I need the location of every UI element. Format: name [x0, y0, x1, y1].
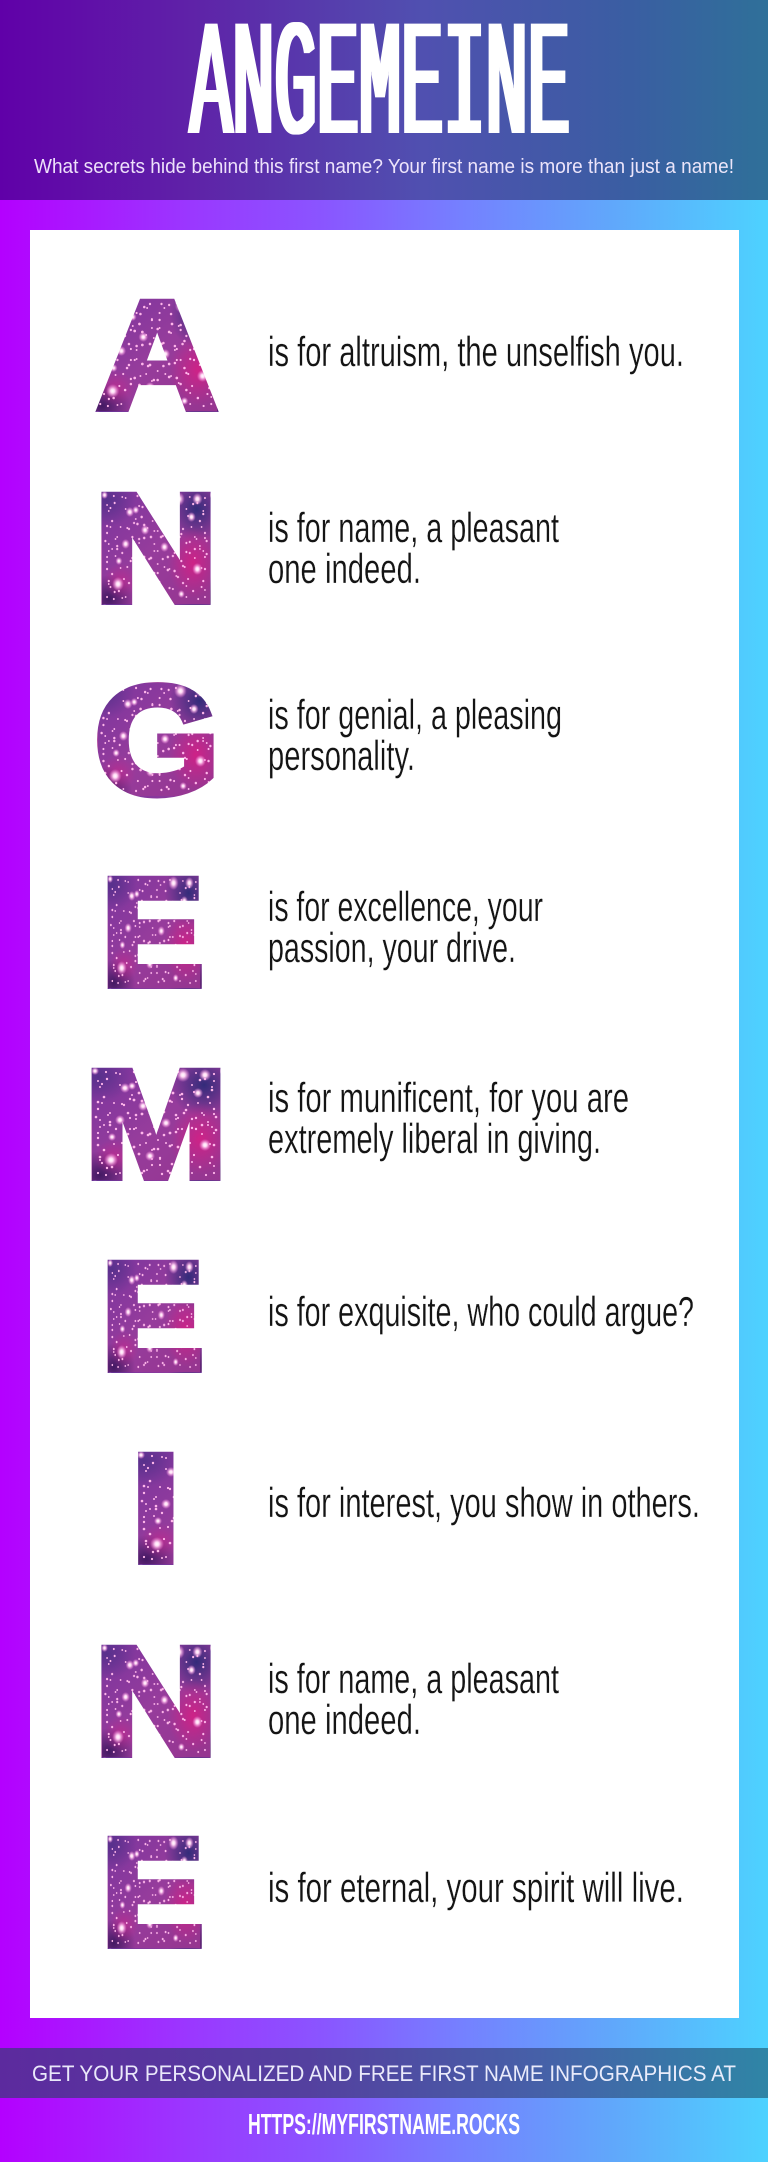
row: letter E	[101, 1231, 694, 1402]
galaxy letter N: N	[94, 1616, 218, 1786]
galaxy letter M: M	[85, 1039, 227, 1210]
galaxy letter G: G	[95, 655, 219, 825]
text: name	[268, 504, 559, 592]
row: letter I	[131, 1423, 700, 1594]
text: munificent: extremely liberal in giving.	[268, 1115, 601, 1162]
white content panel	[30, 230, 739, 2018]
text: name	[268, 1655, 559, 1743]
text: munificent	[268, 1074, 629, 1162]
galaxy letter E: E	[101, 1231, 204, 1402]
galaxy letter E: E	[101, 847, 204, 1018]
row: letter E	[101, 1807, 684, 1978]
text: genial	[268, 691, 562, 779]
text: name: is for name, a pleasant	[268, 504, 559, 551]
text: excellence: passion, your drive.	[268, 924, 516, 971]
text: excellence: is for excellence, your	[268, 883, 543, 930]
row: letter E	[101, 847, 543, 1018]
header band	[0, 0, 768, 200]
galaxy letter E: E	[101, 1807, 204, 1978]
row: letter N	[94, 1616, 559, 1786]
footer url: HTTPS://MYFIRSTNAME.ROCKS	[248, 2109, 520, 2141]
text: name: is for name, a pleasant	[268, 1655, 559, 1702]
footer band	[0, 2048, 768, 2098]
galaxy letter A: A	[97, 269, 217, 441]
text: excellence	[268, 883, 543, 971]
text: name: one indeed.	[268, 1696, 421, 1743]
subtitle: What secrets hide behind this first name? Your first name is more than just a name!	[34, 155, 734, 178]
row: letter A	[97, 269, 684, 441]
row: letter N	[94, 463, 559, 633]
text: genial: personality.	[268, 732, 415, 779]
text: name: one indeed.	[268, 545, 421, 592]
row: letter G	[95, 655, 562, 825]
text: genial: is for genial, a pleasing	[268, 691, 562, 738]
row: letter M	[85, 1039, 629, 1210]
galaxy letter N: N	[94, 463, 218, 633]
galaxy letter I: I	[131, 1423, 181, 1594]
